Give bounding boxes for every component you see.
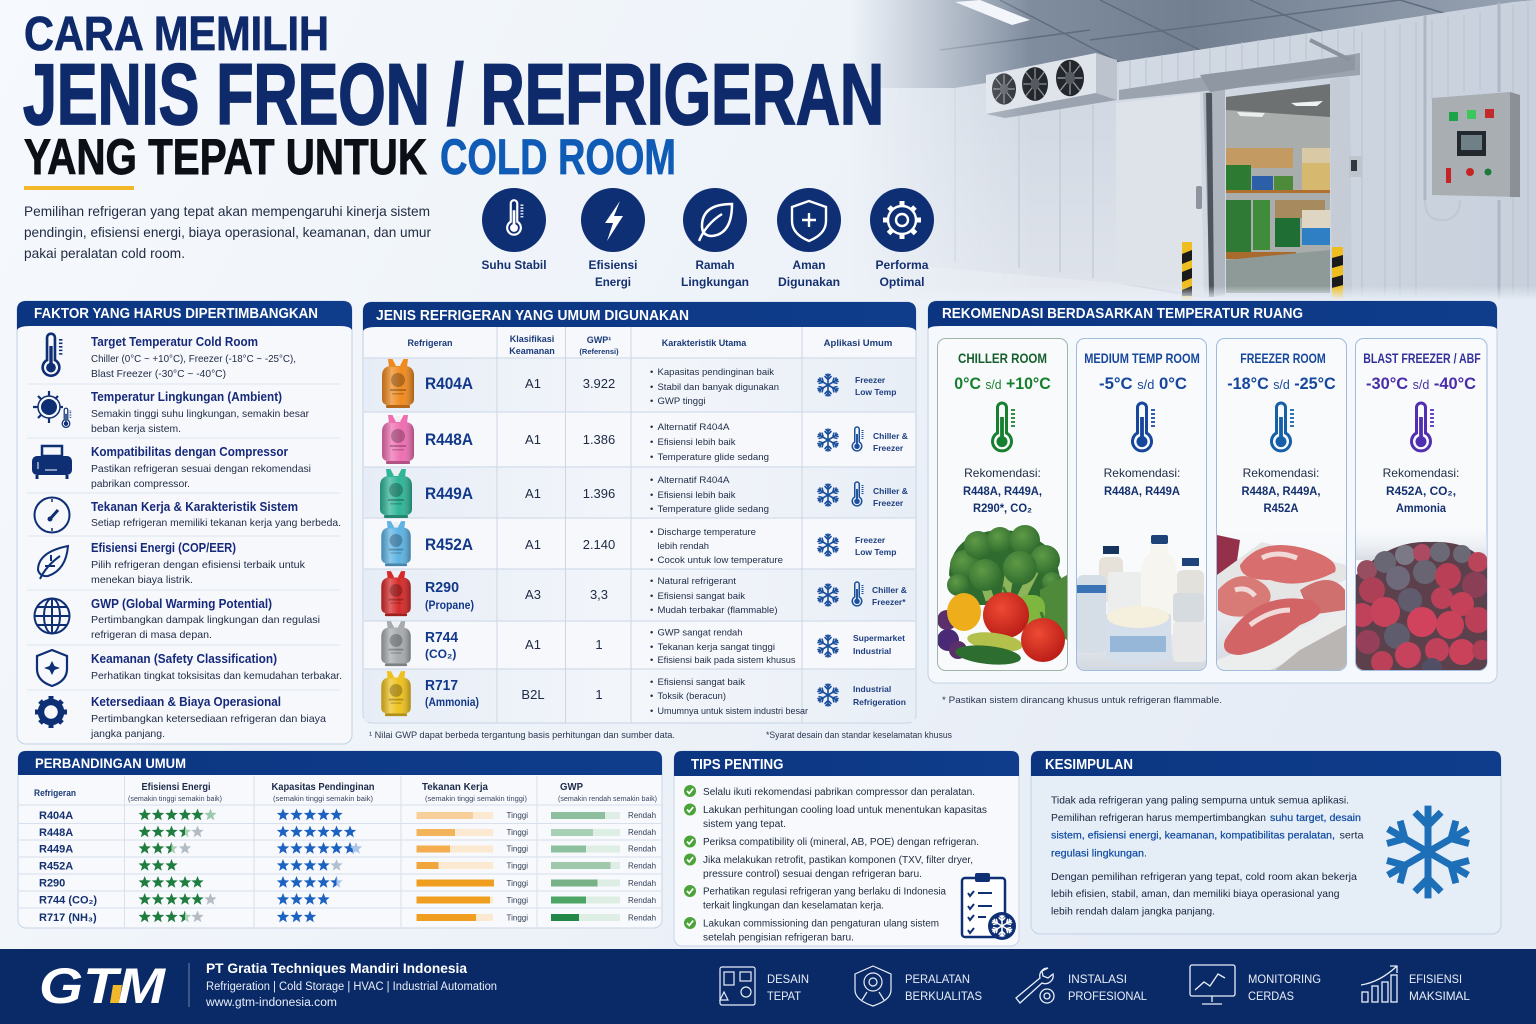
conclusion text: sistem, efisiensi energi, keamanan, kompatibilitas peralatan, bbox=[1051, 830, 1335, 842]
evaporator unit bbox=[986, 53, 1117, 118]
row: R404A: Low Temp bbox=[855, 387, 896, 397]
table column headers: Keamanan bbox=[509, 346, 555, 356]
panel: rekomendasi berdasarkan temperatur bbox=[928, 301, 1497, 683]
panel: tips penting bbox=[674, 751, 1019, 946]
row: R290: Natural refrigerant bbox=[658, 576, 736, 587]
row: R744: • bbox=[650, 642, 653, 653]
row: R717: (Ammonia) bbox=[425, 695, 479, 709]
item: gwp: GWP (Global Warming Potential) bbox=[91, 597, 272, 611]
tip list bbox=[684, 785, 987, 944]
tip list: pressure control) sesuai dengan refrigeran baru. bbox=[703, 869, 922, 880]
row: R717: R717 bbox=[425, 678, 458, 694]
heading: tips bbox=[674, 751, 1019, 776]
row: R404A: Kapasitas pendinginan baik bbox=[658, 367, 774, 378]
row: R744: R744 bbox=[425, 630, 458, 646]
row: R448A bbox=[382, 415, 908, 464]
row: compare R452A: Rendah bbox=[628, 862, 656, 870]
row: R448A: • bbox=[650, 422, 653, 433]
row: R452A: R452A bbox=[425, 535, 473, 554]
tip list: Perhatikan regulasi refrigeran yang berlaku di Indonesia bbox=[703, 886, 946, 898]
item: efisiensi energi bbox=[38, 541, 306, 586]
row: compare R452A bbox=[39, 859, 656, 872]
row: R448A: Freezer bbox=[873, 443, 904, 453]
image: dairy products bbox=[1077, 535, 1206, 670]
row: R448A: Temperature glide sedang bbox=[658, 452, 769, 463]
row: compare R449A: Rendah bbox=[628, 844, 656, 854]
card: blast freezer: Ammonia bbox=[1396, 501, 1446, 515]
heading: kesimpulan bbox=[1031, 751, 1501, 776]
table column headers: Karakteristik Utama bbox=[662, 338, 747, 348]
row: R404A: GWP tinggi bbox=[658, 396, 706, 407]
table footnotes: *Syarat desain dan standar keselamatan khusus bbox=[766, 730, 952, 740]
footer feature: efisiensi maksimal bbox=[1361, 966, 1471, 1003]
icon: efisiensi energi: Energi bbox=[595, 275, 631, 289]
card: medium temp room bbox=[1076, 338, 1206, 670]
row: R404A: • bbox=[650, 382, 653, 393]
heading: rekomendasi: REKOMENDASI BERDASARKAN TEMPERATUR RUANG bbox=[942, 305, 1303, 322]
card: medium temp room: R448A, R449A bbox=[1104, 484, 1180, 498]
footer band bbox=[0, 949, 1536, 1024]
row: R290: Mudah terbakar (flammable) bbox=[658, 605, 778, 616]
item: kompatibilitas bbox=[32, 445, 311, 490]
row: compare R448A: R448A bbox=[39, 827, 73, 839]
item: ketersediaan: Ketersediaan & Biaya Operasional bbox=[91, 695, 281, 709]
row: compare R290 bbox=[39, 876, 656, 890]
company info: PT Gratia Techniques Mandiri Indonesia bbox=[206, 960, 467, 976]
card: freezer room: Rekomendasi: bbox=[1243, 466, 1319, 480]
item: temperatur lingkungan bbox=[33, 390, 309, 435]
card: blast freezer: Rekomendasi: bbox=[1383, 466, 1459, 480]
row: R717: 1 bbox=[595, 687, 603, 702]
row: R744: Industrial bbox=[853, 646, 891, 656]
item: keamanan: Keamanan (Safety Classification) bbox=[91, 652, 277, 666]
row: R448A: 1.386 bbox=[583, 432, 615, 447]
tip list: Lakukan commissioning dan pengaturan ulang sistem bbox=[703, 918, 939, 930]
row: compare R404A: Rendah bbox=[628, 811, 656, 820]
row: R449A bbox=[380, 469, 908, 518]
row: compare R717 bbox=[39, 910, 656, 924]
footer feature: monitoring cerdas: MONITORING bbox=[1248, 974, 1321, 986]
row: compare R290: Rendah bbox=[628, 879, 656, 888]
footer feature: desain tepat: DESAIN bbox=[767, 974, 809, 986]
footnote: flammable: * Pastikan sistem dirancang khusus untuk refrigeran flammable. bbox=[942, 695, 1222, 706]
panel: jenis refrigeran table bbox=[363, 302, 916, 723]
heading: kesimpulan: KESIMPULAN bbox=[1045, 757, 1133, 773]
icon: aman digunakan: Digunakan bbox=[778, 275, 840, 289]
row: R290: (Propane) bbox=[425, 598, 474, 612]
footer feature: instalasi profesional: PROFESIONAL bbox=[1068, 991, 1148, 1003]
row: R290: R290 bbox=[425, 580, 459, 596]
card: medium temp room: -5°C s/d 0°C bbox=[1099, 374, 1187, 393]
row: compare R452A: R452A bbox=[39, 860, 73, 872]
footer feature: peralatan berkualitas: BERKUALITAS bbox=[905, 991, 982, 1003]
table column headers: (Referensi) bbox=[579, 347, 619, 356]
row: R449A: Chiller & bbox=[873, 486, 908, 496]
row: R404A: Stabil dan banyak digunakan bbox=[658, 382, 779, 393]
conclusion text: Pemilihan refrigeran harus mempertimbangkan bbox=[1051, 812, 1266, 824]
icon: clipboard checklist bbox=[962, 873, 1016, 940]
company info: www.gtm-indonesia.com bbox=[205, 997, 337, 1009]
item: keamanan: Perhatikan tingkat toksisitas dan kemudahan terbakar. bbox=[91, 670, 342, 682]
row: R452A: A1 bbox=[525, 537, 541, 552]
row: R404A: R404A bbox=[425, 374, 473, 393]
footer feature: instalasi profesional: INSTALASI bbox=[1068, 974, 1127, 986]
row: compare R404A: Tinggi bbox=[506, 811, 528, 820]
row: R744: 1 bbox=[595, 637, 603, 652]
table column headers: GWP¹ bbox=[587, 335, 611, 345]
logo: GTM: GTM bbox=[39, 958, 167, 1014]
row: R449A: A1 bbox=[525, 486, 541, 501]
image: frozen meat bbox=[1217, 535, 1346, 670]
row: compare R290: Tinggi bbox=[506, 879, 528, 888]
table footnotes: ¹ Nilai GWP dapat berbeda tergantung basis perhitungan dan sumber data. bbox=[369, 730, 675, 740]
row: compare R448A: Tinggi bbox=[506, 828, 528, 837]
row: compare R744 bbox=[39, 893, 656, 906]
comparison column headers: (semakin tinggi semakin baik) bbox=[128, 796, 222, 803]
photo: cold room interior bbox=[850, 0, 1536, 300]
card: chiller room: Rekomendasi: bbox=[964, 466, 1041, 480]
row: R717: • bbox=[650, 706, 653, 717]
item: efisiensi energi: Efisiensi Energi (COP/EER) bbox=[91, 541, 236, 555]
row: R290: • bbox=[650, 605, 653, 616]
item: gwp bbox=[34, 597, 320, 641]
row: compare R290: R290 bbox=[39, 878, 65, 890]
row: R717: • bbox=[650, 691, 653, 702]
card: chiller room: R448A, R449A, bbox=[963, 484, 1042, 498]
table column headers: Refrigeran bbox=[407, 338, 453, 348]
icon: ramah lingkungan: Ramah bbox=[696, 258, 734, 272]
panel: faktor yang harus dipertimbangkan bbox=[17, 301, 352, 744]
item: keamanan bbox=[37, 650, 342, 686]
table column headers: Klasifikasi bbox=[510, 334, 554, 344]
title: JENIS FREON / REFRIGERAN bbox=[23, 47, 884, 143]
row: R717: Umumnya untuk sistem industri besar bbox=[658, 706, 808, 717]
row: compare R744: Tinggi bbox=[506, 896, 528, 905]
row: R290: • bbox=[650, 576, 653, 587]
row: R449A: Efisiensi lebih baik bbox=[658, 490, 736, 501]
row: R452A: • bbox=[650, 527, 653, 538]
icon: aman digunakan: Aman bbox=[792, 258, 826, 272]
row: R449A: Freezer bbox=[873, 498, 904, 508]
title bbox=[23, 8, 884, 185]
row: R452A: Cocok untuk low temperature bbox=[658, 555, 783, 566]
intro paragraph: Pemilihan refrigeran yang tepat akan mempengaruhi kinerja sistem bbox=[24, 203, 430, 219]
tip list: Selalu ikuti rekomendasi pabrikan compressor dan peralatan. bbox=[703, 787, 975, 798]
card: chiller room: R290*, CO₂ bbox=[973, 501, 1032, 515]
footer feature: monitoring cerdas: CERDAS bbox=[1248, 991, 1294, 1003]
row: R452A: 2.140 bbox=[583, 537, 615, 552]
panel: perbandingan umum bbox=[18, 751, 662, 928]
row: compare R449A: Tinggi bbox=[506, 844, 528, 854]
heading: jenis refrigeran: JENIS REFRIGERAN YANG UMUM DIGUNAKAN bbox=[376, 307, 689, 324]
row: R744: • bbox=[650, 655, 653, 666]
row: compare R717: R717 (NH₃) bbox=[39, 912, 97, 924]
comparison column headers: GWP bbox=[560, 781, 583, 793]
row: R449A: R449A bbox=[425, 484, 473, 503]
row: R290: Chiller & bbox=[872, 585, 907, 595]
table footnotes bbox=[369, 730, 952, 740]
row: compare R404A: R404A bbox=[39, 810, 73, 822]
conclusion text bbox=[1051, 794, 1364, 918]
row: R452A bbox=[381, 521, 896, 566]
row: R744: (CO₂) bbox=[425, 647, 456, 661]
item: temperatur lingkungan: Semakin tinggi suhu lingkungan, semakin besar bbox=[91, 408, 309, 420]
heading: perbandingan: PERBANDINGAN UMUM bbox=[35, 755, 186, 771]
safety bollards bbox=[1182, 242, 1343, 300]
icon: performa optimal: Optimal bbox=[880, 275, 924, 289]
conclusion text: . bbox=[1144, 848, 1147, 860]
item: ketersediaan bbox=[35, 695, 326, 740]
sliding door bbox=[1116, 40, 1360, 300]
footer feature: peralatan berkualitas: PERALATAN bbox=[905, 974, 970, 986]
icon: efisiensi energi: Efisiensi bbox=[588, 258, 638, 272]
row: R404A: Freezer bbox=[855, 375, 886, 385]
conclusion text: Tidak ada refrigeran yang paling sempurna untuk semua aplikasi. bbox=[1051, 794, 1349, 806]
item: efisiensi energi: Pilih refrigeran dengan efisiensi terbaik untuk bbox=[91, 559, 306, 571]
icon: ramah lingkungan: Lingkungan bbox=[681, 275, 749, 289]
row: compare R717: Tinggi bbox=[506, 914, 528, 922]
row: R717: Refrigeration bbox=[853, 697, 906, 707]
row: R452A: Freezer bbox=[855, 535, 886, 545]
heading: tips: TIPS PENTING bbox=[691, 757, 784, 773]
row: R744: • bbox=[650, 628, 653, 638]
row: R717 bbox=[381, 671, 906, 717]
conclusion text: Dengan pemilihan refrigeran yang tepat, cold room akan bekerja bbox=[1051, 871, 1357, 883]
intro paragraph bbox=[24, 203, 431, 261]
title: CARA MEMILIH bbox=[24, 8, 329, 61]
item: target temperatur: Chiller (0°C ~ +10°C), Freezer (-18°C ~ -25°C), bbox=[91, 353, 296, 365]
comparison column headers bbox=[34, 781, 657, 803]
footer feature: instalasi profesional bbox=[1016, 968, 1148, 1003]
item: tekanan kerja: Tekanan Kerja & Karakteristik Sistem bbox=[91, 500, 298, 514]
intro paragraph: pendingin, efisiensi energi, biaya operasional, keamanan, dan umur bbox=[24, 224, 431, 240]
benefit icons row bbox=[482, 188, 934, 289]
item: target temperatur: Target Temperatur Cold Room bbox=[91, 335, 258, 349]
row: R717: • bbox=[650, 677, 653, 688]
row: R290: A3 bbox=[525, 587, 541, 602]
row: compare R744: Rendah bbox=[628, 896, 656, 905]
icon: suhu stabil: Suhu Stabil bbox=[482, 258, 546, 272]
row: compare R404A bbox=[39, 808, 656, 822]
comparison column headers: (semakin tinggi semakin tinggi) bbox=[425, 796, 527, 803]
conclusion text: serta bbox=[1340, 830, 1364, 842]
conclusion text: suhu target, desain bbox=[1270, 812, 1361, 824]
row: R290: Efisiensi sangat baik bbox=[658, 591, 745, 602]
row: R452A: Low Temp bbox=[855, 547, 896, 557]
row: compare R744: R744 (CO₂) bbox=[39, 894, 97, 906]
card: chiller room bbox=[937, 338, 1068, 670]
card: chiller room: CHILLER ROOM bbox=[958, 350, 1047, 366]
row: R290 bbox=[381, 571, 907, 616]
row: R404A: • bbox=[650, 367, 653, 378]
row: R404A: 3.922 bbox=[583, 376, 615, 391]
row: R290: Freezer* bbox=[872, 597, 906, 607]
row: compare R449A bbox=[39, 842, 656, 856]
icon: large snowflake bbox=[1381, 806, 1475, 898]
comparison column headers: (semakin rendah semakin baik) bbox=[558, 796, 657, 803]
company info bbox=[205, 960, 497, 1009]
panel: kesimpulan bbox=[1031, 751, 1501, 934]
footer feature: desain tepat bbox=[720, 967, 809, 1005]
control panel bbox=[1349, 92, 1520, 197]
tip list: sistem yang tepat. bbox=[703, 819, 786, 830]
footer feature: efisiensi maksimal: EFISIENSI bbox=[1409, 974, 1462, 986]
row: R449A: • bbox=[650, 475, 653, 486]
item: ketersediaan: Pertimbangkan ketersediaan refrigeran dan biaya bbox=[91, 713, 326, 725]
item: temperatur lingkungan: Temperatur Lingkungan (Ambient) bbox=[91, 390, 282, 404]
card: blast freezer: R452A, CO₂, bbox=[1386, 484, 1456, 498]
row: R449A: 1.396 bbox=[583, 486, 615, 501]
card: medium temp room: Rekomendasi: bbox=[1104, 466, 1180, 480]
row: compare R452A: Tinggi bbox=[506, 862, 528, 870]
tip list: setelah pengisian refrigeran baru. bbox=[703, 932, 854, 944]
row: compare R717: Rendah bbox=[628, 914, 656, 922]
item: tekanan kerja: Setiap refrigeran memiliki tekanan kerja yang berbeda. bbox=[91, 517, 341, 529]
row: compare R448A: Rendah bbox=[628, 828, 656, 837]
item: gwp: refrigeran di masa depan. bbox=[91, 629, 212, 641]
item: ketersediaan: jangka panjang. bbox=[90, 728, 165, 740]
row: R449A: • bbox=[650, 490, 653, 501]
row: R404A bbox=[382, 359, 896, 408]
icon: performa optimal bbox=[870, 188, 934, 289]
heading: rekomendasi bbox=[928, 301, 1497, 329]
comparison column headers: Kapasitas Pendinginan bbox=[272, 781, 374, 793]
card: freezer room: R452A bbox=[1264, 501, 1299, 515]
row: R717: B2L bbox=[521, 687, 545, 702]
heading: jenis refrigeran bbox=[363, 302, 916, 331]
row: compare R448A bbox=[39, 826, 656, 839]
footer feature: efisiensi maksimal: MAKSIMAL bbox=[1409, 991, 1471, 1003]
row: R744: Supermarket bbox=[853, 633, 905, 643]
icon: ramah lingkungan bbox=[681, 188, 749, 289]
image: vegetables bbox=[937, 525, 1067, 667]
storage room with shelves and crates bbox=[1226, 84, 1330, 293]
card: medium temp room: MEDIUM TEMP ROOM bbox=[1084, 350, 1200, 366]
comparison column headers: Efisiensi Energi bbox=[142, 781, 211, 793]
card: chiller room: 0°C s/d +10°C bbox=[954, 374, 1051, 393]
row: R717: Industrial bbox=[853, 684, 891, 694]
row: R449A: Temperature glide sedang bbox=[658, 504, 769, 515]
item: kompatibilitas: Pastikan refrigeran sesuai dengan rekomendasi bbox=[91, 463, 311, 475]
company info: Refrigeration | Cold Storage | HVAC | Industrial Automation bbox=[206, 981, 497, 993]
icon: aman digunakan bbox=[777, 188, 841, 289]
tip list: Periksa compatibility oli (mineral, AB, POE) dengan refrigeran. bbox=[703, 837, 979, 848]
row: R717: Toksik (beracun) bbox=[658, 691, 726, 702]
footer feature: desain tepat: TEPAT bbox=[767, 991, 801, 1003]
conclusion text: regulasi lingkungan bbox=[1051, 848, 1144, 860]
item: target temperatur bbox=[43, 334, 296, 380]
title: COLD ROOM bbox=[440, 129, 676, 185]
item: temperatur lingkungan: beban kerja sistem. bbox=[91, 423, 181, 435]
card: blast freezer: -30°C s/d -40°C bbox=[1366, 374, 1476, 393]
row: R744: GWP sangat rendah bbox=[658, 628, 742, 638]
icon: suhu stabil bbox=[482, 188, 546, 272]
row: R717: Efisiensi sangat baik bbox=[658, 677, 745, 688]
tip list: terkait lingkungan dan keselamatan kerja. bbox=[703, 900, 884, 912]
conclusion text: lebih efisien, stabil, aman, dan memiliki biaya operasional yang bbox=[1051, 888, 1340, 900]
row: R448A: • bbox=[650, 452, 653, 463]
accent bar bbox=[24, 186, 134, 190]
item: efisiensi energi: menekan biaya listrik. bbox=[91, 574, 193, 586]
card: freezer room: R448A, R449A, bbox=[1242, 484, 1320, 498]
table column headers: Aplikasi Umum bbox=[824, 338, 892, 349]
card: freezer room bbox=[1216, 338, 1347, 670]
heading: faktor bbox=[17, 301, 352, 330]
tip list: Lakukan perhitungan cooling load untuk menentukan kapasitas bbox=[703, 805, 987, 816]
footer feature: peralatan berkualitas bbox=[855, 966, 982, 1006]
row: R744: Efisiensi baik pada sistem khusus bbox=[658, 655, 796, 666]
item: gwp: Pertimbangkan dampak lingkungan dan regulasi bbox=[91, 614, 320, 626]
icon: efisiensi energi bbox=[581, 188, 645, 289]
comparison column headers: (semakin tinggi semakin baik) bbox=[273, 796, 373, 803]
row: R404A: A1 bbox=[525, 376, 541, 391]
row: R744 bbox=[381, 621, 905, 666]
row: R449A: Alternatif R404A bbox=[658, 475, 730, 486]
row: R449A: • bbox=[650, 504, 653, 515]
heading: faktor: FAKTOR YANG HARUS DIPERTIMBANGKAN bbox=[34, 305, 318, 322]
item: kompatibilitas: Kompatibilitas dengan Compressor bbox=[91, 445, 288, 459]
item: tekanan kerja bbox=[34, 498, 341, 532]
row: R448A: R448A bbox=[425, 430, 473, 449]
row: R448A: • bbox=[650, 437, 653, 448]
comparison column headers: Tekanan Kerja bbox=[422, 781, 488, 793]
card: blast freezer: BLAST FREEZER / ABF bbox=[1363, 350, 1481, 366]
row: R744: A1 bbox=[525, 637, 541, 652]
row: R744: Tekanan kerja sangat tinggi bbox=[658, 642, 775, 653]
footer feature: monitoring cerdas bbox=[1190, 965, 1321, 1004]
row: R452A: lebih rendah bbox=[658, 541, 709, 552]
heading: perbandingan bbox=[18, 751, 662, 775]
card: freezer room: FREEZER ROOM bbox=[1240, 350, 1326, 366]
row: R452A: • bbox=[650, 555, 653, 566]
item: target temperatur: Blast Freezer (-30°C ~ -40°C) bbox=[91, 368, 226, 380]
title: YANG TEPAT UNTUK bbox=[24, 129, 427, 185]
card: blast freezer bbox=[1350, 338, 1492, 678]
table column headers bbox=[407, 334, 892, 356]
card: freezer room: -18°C s/d -25°C bbox=[1227, 374, 1336, 393]
conclusion text: lebih rendah dalam jangka panjang. bbox=[1051, 906, 1215, 918]
row: R290: 3,3 bbox=[590, 587, 608, 602]
comparison column headers: Refrigeran bbox=[34, 788, 76, 799]
row: R404A: • bbox=[650, 396, 653, 407]
row: R448A: Efisiensi lebih baik bbox=[658, 437, 736, 448]
row: R452A: Discharge temperature bbox=[658, 527, 756, 538]
row: R448A: A1 bbox=[525, 432, 541, 447]
icon: performa optimal: Performa bbox=[876, 258, 929, 272]
row: compare R449A: R449A bbox=[39, 844, 73, 856]
row: R448A: Alternatif R404A bbox=[658, 422, 730, 433]
row: R448A: Chiller & bbox=[873, 431, 908, 441]
intro paragraph: pakai peralatan cold room. bbox=[24, 245, 185, 261]
item: kompatibilitas: pabrikan compressor. bbox=[91, 478, 190, 490]
tip list: Jika melakukan retrofit, pastikan komponen (TXV, filter dryer, bbox=[703, 855, 973, 866]
row: R290: • bbox=[650, 591, 653, 602]
image: frozen berries bbox=[1356, 531, 1487, 670]
